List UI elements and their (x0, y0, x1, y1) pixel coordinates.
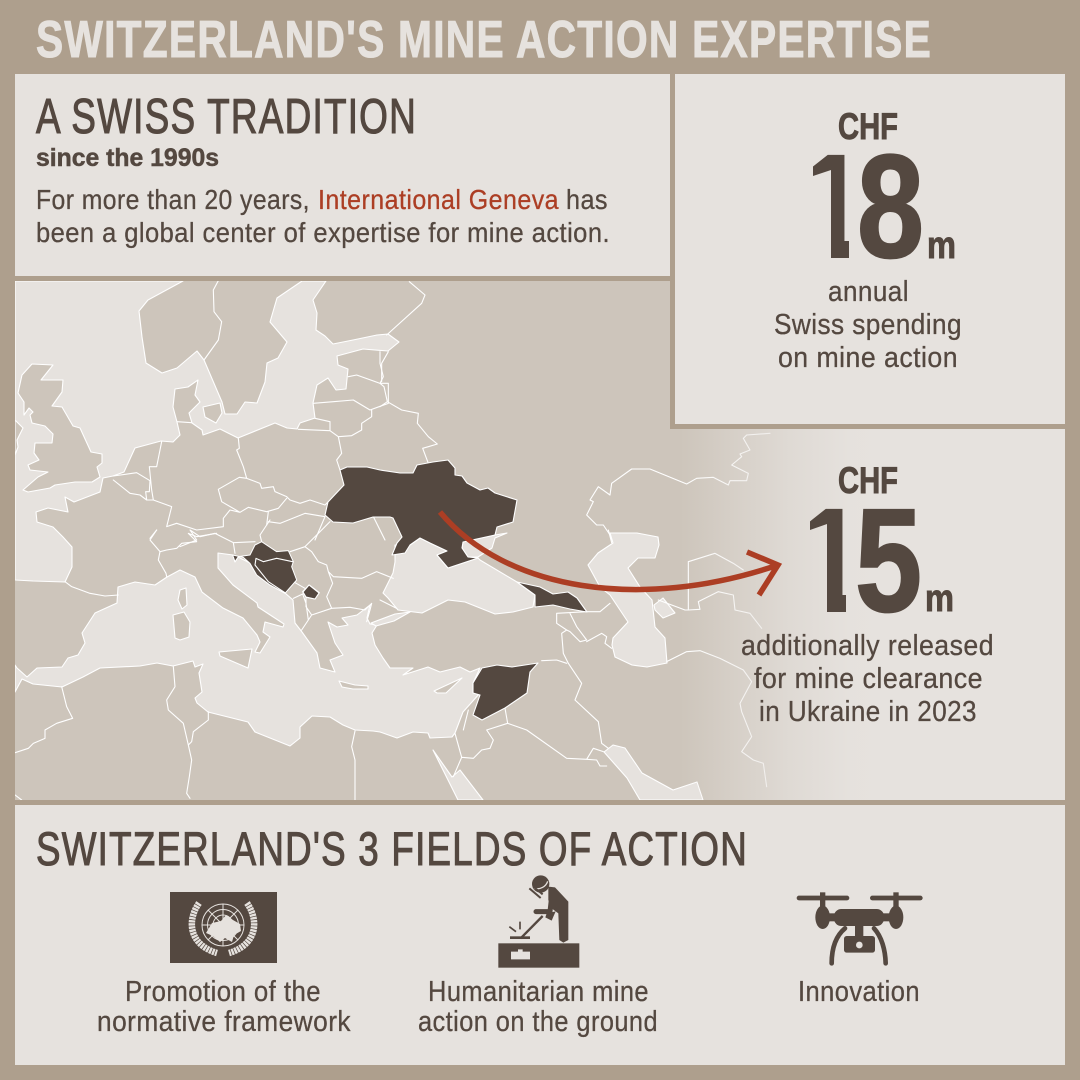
islands (15, 364, 462, 693)
panel: fields of action (15, 805, 1065, 1065)
caption: additionally released (741, 630, 994, 662)
map of Europe and the Middle East (15, 281, 1065, 800)
figure: 18 m: m (927, 225, 956, 267)
country: Georgia (517, 582, 587, 612)
arrow (440, 512, 778, 595)
heading: A SWISS TRADITION (36, 90, 417, 144)
text block (36, 184, 610, 248)
icon: deminer with detector (498, 875, 579, 968)
country: Syria (473, 663, 538, 720)
country: Kosovo (303, 585, 319, 599)
text block: has (566, 184, 608, 215)
callout: additional funds (741, 460, 994, 728)
caption: in Ukraine in 2023 (759, 696, 977, 728)
figure: 18 m: 8 (857, 125, 924, 289)
caption: normative framework: Promotion of the (125, 976, 321, 1008)
panel: annual spending (670, 74, 1065, 429)
caption: normative framework: normative framework (97, 1006, 351, 1038)
country borders (15, 281, 770, 800)
caption: for mine clearance (754, 663, 983, 695)
caption: mine action on the ground: action on the ground (418, 1006, 658, 1038)
highlighted countries (233, 460, 587, 720)
figure: 15 m (810, 508, 952, 614)
panel: annual spending: CHF (838, 106, 898, 147)
caption: mine action on the ground (418, 976, 658, 1038)
figure: 15 m: 1 (797, 479, 864, 643)
text block: For more than 20 years, (36, 184, 310, 215)
caption: normative framework (97, 976, 351, 1038)
caption: Swiss spending (774, 309, 962, 341)
panel: a Swiss tradition (15, 74, 670, 276)
right-hand fade (680, 429, 1065, 800)
countries: Croatia and Bosnia (233, 542, 297, 593)
caption: mine action on the ground: Humanitarian mine (428, 976, 649, 1008)
text block: International Geneva (318, 184, 559, 215)
figure: 15 m: m (925, 578, 954, 620)
icon: drone (797, 892, 923, 963)
subheading: since the 1990s (36, 144, 219, 172)
callout: additional funds: CHF (838, 460, 898, 501)
icon: UN flag (170, 892, 277, 963)
figure: 18 m (813, 153, 954, 260)
caption (774, 276, 962, 374)
caption: annual (828, 276, 909, 308)
heading: SWITZERLAND'S 3 FIELDS OF ACTION (36, 822, 748, 875)
figure: 15 m: 5 (855, 479, 922, 643)
text block: been a global center of expertise for mine action. (36, 217, 610, 248)
caption (741, 630, 994, 728)
caption: on mine action (778, 342, 958, 374)
country: Ukraine (325, 460, 517, 568)
caption: innovation: Innovation (798, 976, 920, 1008)
figure: 18 m: 1 (799, 125, 866, 289)
